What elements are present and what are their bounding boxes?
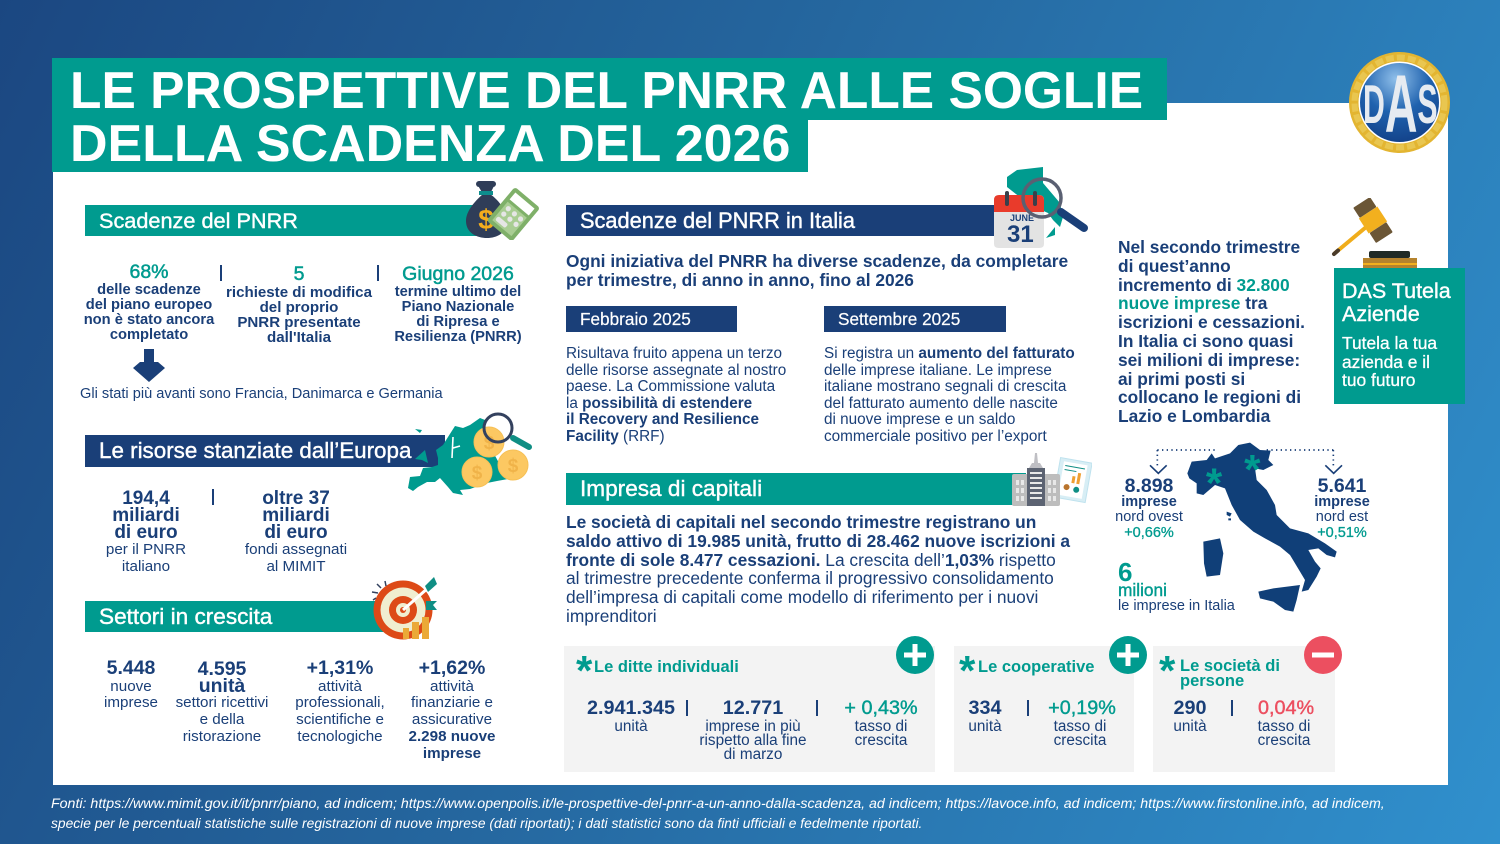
text: Febbraio body: il Recovery and Resilience	[566, 411, 759, 428]
icon: money bag and calculator: $	[478, 204, 494, 235]
text: Settembre body: commerciale positivo per l’export	[824, 428, 1047, 445]
value: +0,19%: tasso di	[1054, 718, 1106, 734]
text: Settembre body: del fatturato aumento delle nascite	[824, 395, 1058, 412]
stat: 194,4 miliardi	[106, 488, 186, 575]
stat: Giugno 2026: Piano Nazionale	[402, 299, 514, 315]
label: Settembre 2025	[824, 306, 1006, 332]
stat: nord est: 5.641	[1318, 475, 1366, 497]
stat: +1,62%	[409, 657, 495, 762]
section bar: Settori in crescita	[85, 601, 390, 632]
value: 0,04%	[1258, 696, 1314, 749]
stat: 68%: del piano europeo	[86, 297, 212, 313]
value: +0,43%: + 0,43%	[844, 696, 918, 718]
value: +0,19%	[1048, 696, 1116, 749]
arrow: down	[133, 349, 165, 382]
stat: +1,31%: tecnologiche	[297, 728, 383, 745]
icon: minus	[1304, 636, 1342, 674]
label: Febbraio 2025	[566, 306, 737, 332]
icon: money bag and calculator	[466, 181, 539, 240]
value: 290: unità	[1173, 718, 1207, 734]
stat: 68%	[84, 261, 214, 343]
stat: oltre 37 miliardi: di euro	[264, 522, 328, 543]
panel: DAS Tutela Aziende: DAS Tutela	[1342, 279, 1451, 303]
stat: 5.448: nuove	[110, 678, 152, 694]
value: 0,04%: crescita	[1258, 732, 1310, 749]
stat: +1,31%: attività	[318, 678, 362, 694]
stat: 5 richieste: 5	[294, 263, 304, 285]
stat: 6 milioni	[1118, 557, 1235, 614]
panel: società di persone	[1153, 646, 1335, 772]
heading: ditte individuali: Le ditte individuali	[594, 658, 739, 676]
panel: DAS Tutela Aziende: Aziende	[1342, 302, 1420, 326]
stat: 4.595: settori ricettivi	[176, 694, 268, 711]
title: DELLA SCADENZA DEL 2026	[70, 114, 790, 172]
stat: 194,4 miliardi: di euro	[114, 522, 178, 543]
text: Settembre body: Si registra un aumento del fatturato	[824, 345, 1075, 362]
stat: 5 richieste: PNRR presentate	[237, 314, 361, 331]
icon: calendar with Italy and magnifier	[994, 167, 1088, 248]
heading: società di persone	[1159, 647, 1280, 694]
footer: fonti: specie per le percentuali statistiche sulle registrazioni di nuove imprese (dati riportati); i dati statistici sono da finti ufficiali e fedelmente riportati.	[51, 815, 922, 831]
icon: plus	[1109, 636, 1147, 674]
heading: ditte individuali	[576, 647, 739, 694]
icon: Europe map with coins: $	[472, 463, 483, 484]
value: 12.771: di marzo	[724, 746, 782, 763]
text: secondo trimestre: In Italia ci sono quasi	[1118, 331, 1293, 351]
value: 290	[1173, 696, 1207, 734]
heading: società di persone: Le società di	[1180, 657, 1280, 675]
value: 12.771: rispetto alla fine	[699, 732, 807, 749]
text: Febbraio body: Risultava fruito appena un terzo	[566, 345, 782, 362]
stat: Giugno 2026: Giugno 2026	[402, 263, 514, 285]
stat: 5 richieste: del proprio	[260, 299, 338, 316]
stat: +1,62%: finanziarie e	[411, 694, 493, 711]
stat: 6 milioni: milioni	[1118, 580, 1167, 600]
footer: fonti: Fonti: https://www.mimit.gov.it/it/pnrr/piano, ad indicem; https://www.openpolis.it/le-prospettive-del-pnrr-a-un-anno-dalla-scadenza, ad indicem; https://lavoce.info, ad indicem; https://www.firstonline.info, ad indicem,	[51, 796, 1385, 812]
stat: 68%: 68%	[129, 261, 169, 283]
map: Italy: *	[1206, 460, 1223, 507]
map: Italy	[1150, 442, 1342, 612]
stat: 5 richieste: richieste di modifica	[226, 284, 372, 301]
value: 290: 290	[1173, 696, 1206, 718]
stat: 68%: completato	[110, 327, 188, 343]
section bar: Scadenze del PNRR in Italia	[566, 205, 998, 236]
icon: gavel	[1332, 198, 1417, 268]
text: società di capitali: Le società di capitali nel secondo trimestre registrano un	[566, 512, 1036, 532]
value: 2.941.345: unità	[614, 718, 648, 734]
stat: Giugno 2026: di Ripresa e	[416, 314, 500, 330]
stat: 5.448: 5.448	[107, 657, 155, 679]
text: iniziativa intro	[566, 251, 1068, 290]
value: 334: 334	[968, 696, 1002, 718]
stat: nord est	[1314, 475, 1370, 541]
title	[52, 58, 1167, 172]
section bar: Le risorse stanziate: Le risorse stanziate dall’Europa	[99, 438, 411, 463]
text: secondo trimestre: di quest’anno	[1118, 256, 1231, 276]
section bar: Scadenze del PNRR in Italia: Scadenze del PNRR in Italia	[580, 208, 855, 233]
heading: società di persone: *	[1159, 647, 1175, 694]
stat: 194,4 miliardi: miliardi	[112, 505, 180, 526]
icon: plus	[896, 636, 934, 674]
stat: oltre 37 miliardi	[245, 488, 347, 575]
value: 0,04%: tasso di	[1258, 718, 1310, 734]
value: 2.941.345: 2.941.345	[587, 696, 675, 718]
label: Febbraio 2025: Febbraio 2025	[580, 309, 691, 329]
stat: 194,4 miliardi: italiano	[122, 558, 170, 575]
stat: +1,31%: professionali,	[295, 694, 385, 711]
section bar: Scadenze del PNRR: Scadenze del PNRR	[99, 208, 298, 233]
stat: +1,31%: scientifiche e	[296, 711, 384, 728]
footer: fonti	[51, 795, 1385, 834]
text: Febbraio body: la possibilità di estendere	[566, 395, 752, 412]
stat: nord est: imprese	[1314, 494, 1370, 510]
text: secondo trimestre: incremento di 32.800	[1118, 275, 1290, 295]
panel: cooperative	[954, 646, 1134, 772]
stat: oltre 37 miliardi: fondi assegnati	[245, 541, 347, 558]
value: +0,43%: crescita	[855, 732, 907, 749]
text: società di capitali: dell’impresa di capitali come modello di riferimento per i nuovi	[566, 587, 1038, 607]
text: Febbraio body: paese. La Commissione valuta	[566, 378, 775, 395]
stat: nord ovest: +0,66%	[1124, 525, 1174, 541]
value: +0,19%: +0,19%	[1048, 696, 1116, 718]
white panel	[53, 103, 1448, 785]
value: +0,43%	[844, 696, 918, 749]
stat: +1,62%: +1,62%	[419, 657, 485, 679]
stat: nord est: nord est	[1316, 509, 1368, 525]
stat: 5.448: imprese	[104, 694, 158, 711]
text: stati più avanti: Gli stati più avanti sono Francia, Danimarca e Germania	[80, 386, 443, 402]
stat: 4.595: ristorazione	[183, 728, 261, 745]
text: secondo trimestre: nuove imprese tra	[1118, 293, 1267, 313]
value: 12.771: imprese in più	[705, 718, 801, 734]
icon: buildings and report	[1012, 453, 1092, 506]
title: LE PROSPETTIVE DEL PNRR ALLE SOGLIE	[70, 60, 1143, 118]
stat: +1,62%: imprese	[423, 745, 481, 762]
section bar: Impresa di capitali	[566, 473, 1026, 505]
stat: +1,31%	[295, 657, 385, 745]
text: iniziativa intro: per trimestre, di anno in anno, fino al 2026	[566, 270, 914, 290]
stat: 5 richieste	[226, 263, 372, 346]
panel: DAS Tutela Aziende: tuo futuro	[1342, 370, 1415, 390]
value: +0,43%: tasso di	[855, 718, 907, 734]
icon: Europe map with coins: $	[484, 433, 495, 454]
stat: nord ovest	[1115, 475, 1183, 541]
stat: 6 milioni: 6	[1118, 557, 1132, 587]
stat: oltre 37 miliardi: miliardi	[262, 505, 330, 526]
text: secondo trimestre: Lazio e Lombardia	[1118, 406, 1270, 426]
text: Settembre body: delle imprese italiane. Le imprese	[824, 362, 1052, 379]
value: 0,04%: 0,04%	[1258, 696, 1314, 718]
heading: società di persone: persone	[1180, 672, 1244, 690]
stat: Giugno 2026: termine ultimo del	[395, 284, 521, 300]
value: +0,19%: crescita	[1054, 732, 1106, 749]
stat: oltre 37 miliardi: oltre 37	[262, 488, 330, 509]
heading: ditte individuali: *	[576, 647, 592, 694]
stat: 4.595: e della	[200, 711, 244, 728]
stat: nord ovest: imprese	[1121, 494, 1177, 510]
text: Settembre body: di nuove imprese e un saldo	[824, 411, 1015, 428]
stat: +1,62%: attività	[430, 678, 474, 694]
text: società di capitali: al trimestre precedente conferma il progressivo consolidamento	[566, 568, 1054, 588]
panel: DAS Tutela Aziende	[1334, 268, 1465, 404]
stat: 5.448	[104, 657, 158, 711]
stat: 6 milioni: le imprese in Italia	[1118, 598, 1235, 614]
logo: DAS: D	[1363, 75, 1385, 135]
panel: DAS Tutela Aziende: azienda e il	[1342, 352, 1430, 372]
heading: cooperative: *	[959, 647, 975, 694]
logo: DAS	[1349, 52, 1450, 153]
stat: 194,4 miliardi: per il PNRR	[106, 541, 186, 558]
text: Settembre body	[824, 345, 1075, 445]
icon: calendar with Italy and magnifier: 31	[1007, 221, 1034, 248]
logo: DAS: A	[1385, 59, 1417, 151]
stat: oltre 37 miliardi: al MIMIT	[266, 558, 326, 575]
value: 334: unità	[968, 718, 1002, 734]
text: secondo trimestre: ai primi posti si	[1118, 369, 1245, 389]
text: secondo trimestre: iscrizioni e cessazioni.	[1118, 312, 1305, 332]
value: 334	[968, 696, 1002, 734]
heading: cooperative	[959, 647, 1094, 694]
stat: 194,4 miliardi: 194,4	[122, 488, 170, 509]
text: iniziativa intro: Ogni iniziativa del PNRR ha diverse scadenze, da completare	[566, 251, 1068, 271]
panel: ditte individuali	[564, 646, 935, 772]
stat: 68%: non è stato ancora	[84, 312, 214, 328]
stat: 4.595: 4.595	[198, 658, 246, 680]
stat: +1,62%: assicurative	[412, 711, 492, 728]
text: società di capitali: saldo attivo di 19.985 unità, frutto di 28.462 nuove iscrizioni a	[566, 531, 1070, 551]
icon: Europe map with coins: $	[508, 456, 519, 477]
stat: Giugno 2026: Resilienza (PNRR)	[394, 329, 522, 345]
text: secondo trimestre: collocano le regioni di	[1118, 387, 1301, 407]
panel: DAS Tutela Aziende: Tutela la tua	[1342, 333, 1437, 353]
stat: 4.595	[176, 658, 268, 745]
logo: DAS: S	[1417, 75, 1438, 135]
section bar: Le risorse stanziate	[85, 435, 445, 467]
stat: 68%: delle scadenze	[97, 282, 201, 298]
text: secondo trimestre: sei milioni di imprese:	[1118, 350, 1300, 370]
heading: cooperative: Le cooperative	[978, 658, 1094, 676]
text: Febbraio body	[566, 345, 786, 445]
value: 12.771: 12.771	[723, 696, 783, 718]
map: Italy: *	[1244, 446, 1261, 493]
label: Settembre 2025: Settembre 2025	[838, 309, 960, 329]
value: 2.941.345	[587, 696, 675, 734]
stat: 4.595: unità	[199, 675, 245, 697]
text: secondo trimestre	[1118, 237, 1305, 426]
stat: nord ovest: 8.898	[1125, 475, 1173, 497]
text: società di capitali	[566, 512, 1070, 626]
text: società di capitali: imprenditori	[566, 606, 657, 626]
text: società di capitali: fronte di sole 8.477 cessazioni. La crescita dell’1,03% rispetto	[566, 550, 1056, 570]
text: Febbraio body: Facility (RRF)	[566, 428, 665, 445]
text: secondo trimestre: Nel secondo trimestre	[1118, 237, 1300, 257]
stat: nord ovest: nord ovest	[1115, 509, 1183, 525]
stat: +1,31%: +1,31%	[307, 657, 373, 679]
section bar: Scadenze del PNRR	[85, 205, 480, 236]
value: 12.771	[699, 696, 807, 763]
stat: 5 richieste: dall'Italia	[267, 329, 331, 346]
section bar: Settori in crescita: Settori in crescita	[99, 604, 272, 629]
stat: Giugno 2026	[394, 263, 522, 345]
icon: calendar with Italy and magnifier: JUNE	[1010, 213, 1034, 223]
text: Febbraio body: delle risorse assegnate al nostro	[566, 362, 786, 379]
section bar: Impresa di capitali: Impresa di capitali	[580, 476, 762, 501]
text: Settembre body: italiane mostrano segnali di crescita	[824, 378, 1066, 395]
icon: Europe map with coins	[408, 412, 532, 495]
icon: target with arrow	[372, 577, 437, 640]
stat: +1,62%: 2.298 nuove	[409, 728, 495, 745]
stat: nord est: +0,51%	[1317, 525, 1367, 541]
